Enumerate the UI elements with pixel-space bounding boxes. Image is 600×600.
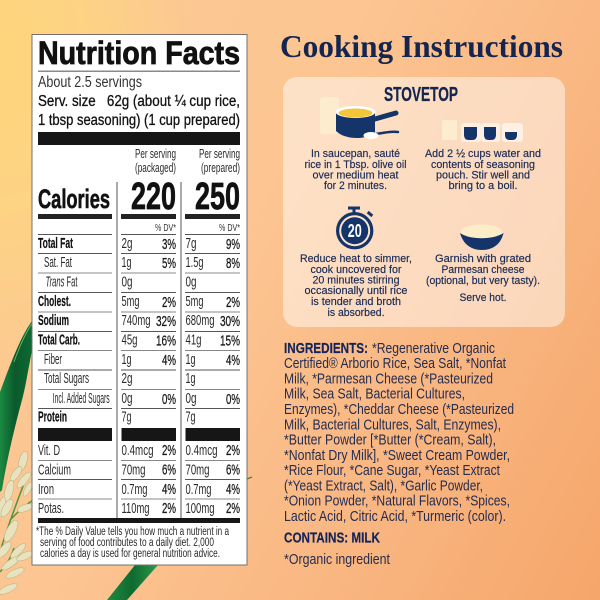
row: added sugars: 0%: [226, 392, 240, 408]
row: saturated fat: 1.5g: [186, 255, 204, 271]
text: step 1: over medium heat: [312, 170, 399, 182]
row: fiber: 1g: [186, 352, 196, 368]
row: vitamin D: 0.4mcg: [186, 443, 218, 459]
text block: ingredients: *Regenerative Organic: [372, 340, 495, 357]
text: step 4: Parmesan cheese: [442, 264, 524, 276]
text: step 3: [300, 253, 412, 319]
text block: ingredients: *Nonfat Dry Milk], *Sweet Cream Powder,: [284, 447, 510, 464]
footnote: *The % Daily Value tells you how much a nutrient in a: [36, 526, 229, 538]
text block: ingredients: Milk, Bacterial Cultures, Salt, Enzymes),: [284, 416, 501, 433]
row: vitamin D: 0.4mcg: [122, 443, 154, 459]
row: added sugars: 0g: [186, 391, 196, 407]
text block: ingredients: [284, 340, 514, 525]
row: protein: 7g: [186, 410, 196, 426]
row: fiber: 1g: [122, 352, 132, 368]
text block: ingredients: Milk, Sea Salt, Bacterial Cultures,: [284, 386, 465, 403]
row: saturated fat: [44, 255, 240, 272]
row: sodium: 680mg: [186, 313, 214, 329]
heading: Cooking Instructions: Cooking Instructions: [280, 28, 563, 64]
row: trans fat: [46, 274, 196, 290]
row: sodium: 32%: [156, 314, 176, 330]
text: step 4: [426, 253, 540, 304]
icon: saucepan with oil and spoon: [320, 97, 398, 139]
text: step 4: (optional, but very tasty).: [426, 275, 540, 287]
text: step 1: rice in 1 Tbsp. olive oil: [304, 159, 406, 171]
text block: ingredients: *Rice Flour, *Cane Sugar, *Yeast Extract: [284, 462, 501, 479]
serving information: [38, 74, 240, 129]
row: total sugars: 2g: [122, 371, 132, 387]
footnote: [36, 526, 229, 560]
panel: nutrition facts: [32, 34, 247, 565]
row: protein: [38, 410, 196, 426]
row: added sugars: 0%: [162, 392, 176, 408]
row: sodium: 30%: [220, 314, 240, 330]
heading: Nutrition Facts: Nutrition Facts: [38, 35, 240, 71]
text: step 3: 20 minutes stirring: [312, 274, 400, 286]
text: step 2: pouch. Stir well and: [436, 170, 530, 182]
text: step 4: Garnish with grated: [435, 253, 531, 265]
icon: measuring cups: [442, 120, 523, 142]
column headers: Per serving: [135, 147, 176, 161]
text: step 1: for 2 minutes.: [324, 180, 387, 192]
row: added sugars: Incl. Added Sugars: [53, 391, 110, 407]
row: saturated fat: 1g: [122, 255, 132, 271]
row: cholesterol: 2%: [226, 295, 240, 311]
row: saturated fat: 5%: [162, 256, 176, 272]
text block: ingredients: Lactic Acid, Citric Acid, *Turmeric (color).: [284, 508, 506, 525]
footnote: calories a day is used for general nutrition advice.: [40, 548, 220, 560]
serving information: Serv. size 62g (about ¼ cup rice,: [38, 93, 240, 110]
icon: bowl of risotto: [460, 224, 504, 250]
row: total sugars: 1g: [186, 371, 196, 387]
row: potassium: 110mg: [122, 501, 150, 517]
row: fiber: 4%: [162, 353, 176, 369]
row: total carbohydrate: 41g: [186, 332, 202, 348]
row: added sugars: [53, 391, 240, 408]
allergen statement: CONTAINS: MILK: [284, 530, 380, 547]
row: total fat: [38, 236, 240, 253]
row: potassium: 2%: [162, 501, 176, 517]
row: total carbohydrate: 45g: [122, 332, 138, 348]
text: step 1: [304, 148, 406, 192]
text block: ingredients: Certified® Arborio Rice, Sea Salt, *Nonfat: [284, 355, 507, 372]
percent daily value headers: [155, 223, 240, 234]
row: trans fat: 0g: [186, 274, 196, 290]
column headers: Per serving: [199, 147, 240, 161]
text block: ingredients: Milk, *Parmesan Cheese (*Pasteurized: [284, 370, 493, 387]
text block: ingredients: (*Yeast Extract, Salt), *Garlic Powder,: [284, 477, 483, 494]
row: potassium: [38, 501, 240, 517]
illustration: rice plant: [0, 320, 252, 600]
row: cholesterol: [38, 294, 240, 311]
row: cholesterol: Cholest.: [38, 294, 71, 310]
column headers: [135, 147, 240, 175]
row: total fat: 9%: [226, 237, 240, 253]
row: fiber: [44, 352, 240, 369]
text: step 2: Add 2 ½ cups water and: [425, 148, 541, 160]
row: saturated fat: Sat. Fat: [44, 255, 72, 271]
text: step 3: cook uncovered for: [310, 264, 402, 276]
row: iron: 0.7mg: [186, 482, 212, 498]
row: iron: Iron: [38, 482, 54, 498]
row: total carbohydrate: 15%: [220, 334, 240, 350]
calories row: Calories: [38, 184, 110, 214]
calories row: 250: [195, 176, 240, 218]
row: total carbohydrate: 16%: [156, 334, 176, 350]
percent daily value headers: % DV*: [219, 223, 240, 234]
row: iron: 4%: [162, 482, 176, 498]
calories row: [38, 176, 240, 219]
row: vitamin D: 2%: [162, 443, 176, 459]
row: fiber: 4%: [226, 353, 240, 369]
row: vitamin D: Vit. D: [38, 443, 60, 459]
row: trans fat: 0g: [122, 274, 132, 290]
row: total sugars: Total Sugars: [44, 371, 89, 387]
row: iron: [38, 482, 240, 498]
row: total carbohydrate: [38, 332, 240, 350]
text: step 3: is absorbed.: [328, 307, 384, 319]
row: iron: 4%: [226, 482, 240, 498]
row: added sugars: 0g: [122, 391, 132, 407]
icon: 20 minute stopwatch: 20: [348, 221, 362, 241]
text: step 2: contents of seasoning: [431, 159, 535, 171]
text: step 1: In saucepan, sauté: [311, 148, 400, 160]
row: fiber: Fiber: [44, 352, 62, 368]
panel: stovetop instructions: [283, 77, 565, 327]
row: total fat: 7g: [186, 236, 196, 252]
column headers: (packaged): [135, 161, 176, 175]
row: sodium: 740mg: [122, 313, 150, 329]
row: calcium: Calcium: [38, 462, 71, 478]
row: total carbohydrate: Total Carb.: [38, 332, 80, 348]
row: calcium: [38, 462, 240, 478]
row: saturated fat: 8%: [226, 256, 240, 272]
row: iron: 0.7mg: [122, 482, 148, 498]
row: protein: Protein: [38, 410, 67, 426]
text: step 3: Reduce heat to simmer,: [300, 253, 412, 265]
percent daily value headers: % DV*: [155, 223, 176, 234]
serving information: 1 tbsp seasoning) (1 cup prepared): [38, 112, 240, 129]
row: total fat: Total Fat: [38, 236, 73, 252]
row: total fat: 3%: [162, 237, 176, 253]
row: sodium: [38, 313, 240, 330]
text: step 2: [425, 148, 541, 192]
row: sodium: Sodium: [38, 313, 69, 329]
row: calcium: 6%: [226, 462, 240, 478]
row: vitamin D: 2%: [226, 443, 240, 459]
row: trans fat: Trans Fat: [46, 274, 78, 290]
row: protein: 7g: [122, 410, 132, 426]
text: step 3: occasionally until rice: [304, 285, 408, 297]
row: total sugars: [44, 371, 196, 387]
text: step 3: is tender and broth: [311, 296, 401, 308]
heading: Stovetop: STOVETOP: [384, 84, 458, 106]
row: total fat: 2g: [122, 236, 132, 252]
text block: ingredients: *Butter Powder [*Butter (*Cream, Salt),: [284, 432, 496, 449]
row: calcium: 6%: [162, 462, 176, 478]
icon: 20 minute stopwatch: [336, 206, 373, 249]
row: calcium: 70mg: [186, 462, 210, 478]
row: vitamin D: [38, 443, 240, 459]
row: potassium: 100mg: [186, 501, 214, 517]
serving information: About 2.5 servings: [38, 74, 142, 91]
column headers: (prepared): [201, 161, 240, 175]
footnote: serving of food contributes to a daily diet. 2,000: [40, 537, 214, 549]
row: calcium: 70mg: [122, 462, 146, 478]
text: step 4: Serve hot.: [460, 292, 506, 304]
row: potassium: Potas.: [38, 501, 64, 517]
text: step 2: bring to a boil.: [448, 180, 518, 192]
organic footnote: *Organic ingredient: [284, 551, 391, 568]
text block: ingredients: *Onion Powder, *Natural Flavors, *Spices,: [284, 493, 510, 510]
row: cholesterol: 2%: [162, 295, 176, 311]
row: cholesterol: 5mg: [122, 294, 140, 310]
text block: ingredients: Enzymes), *Cheddar Cheese (*Pasteurized: [284, 401, 514, 418]
row: cholesterol: 5mg: [186, 294, 204, 310]
calories row: 220: [131, 176, 176, 218]
row: potassium: 2%: [226, 501, 240, 517]
text block: ingredients: INGREDIENTS:: [284, 340, 368, 357]
